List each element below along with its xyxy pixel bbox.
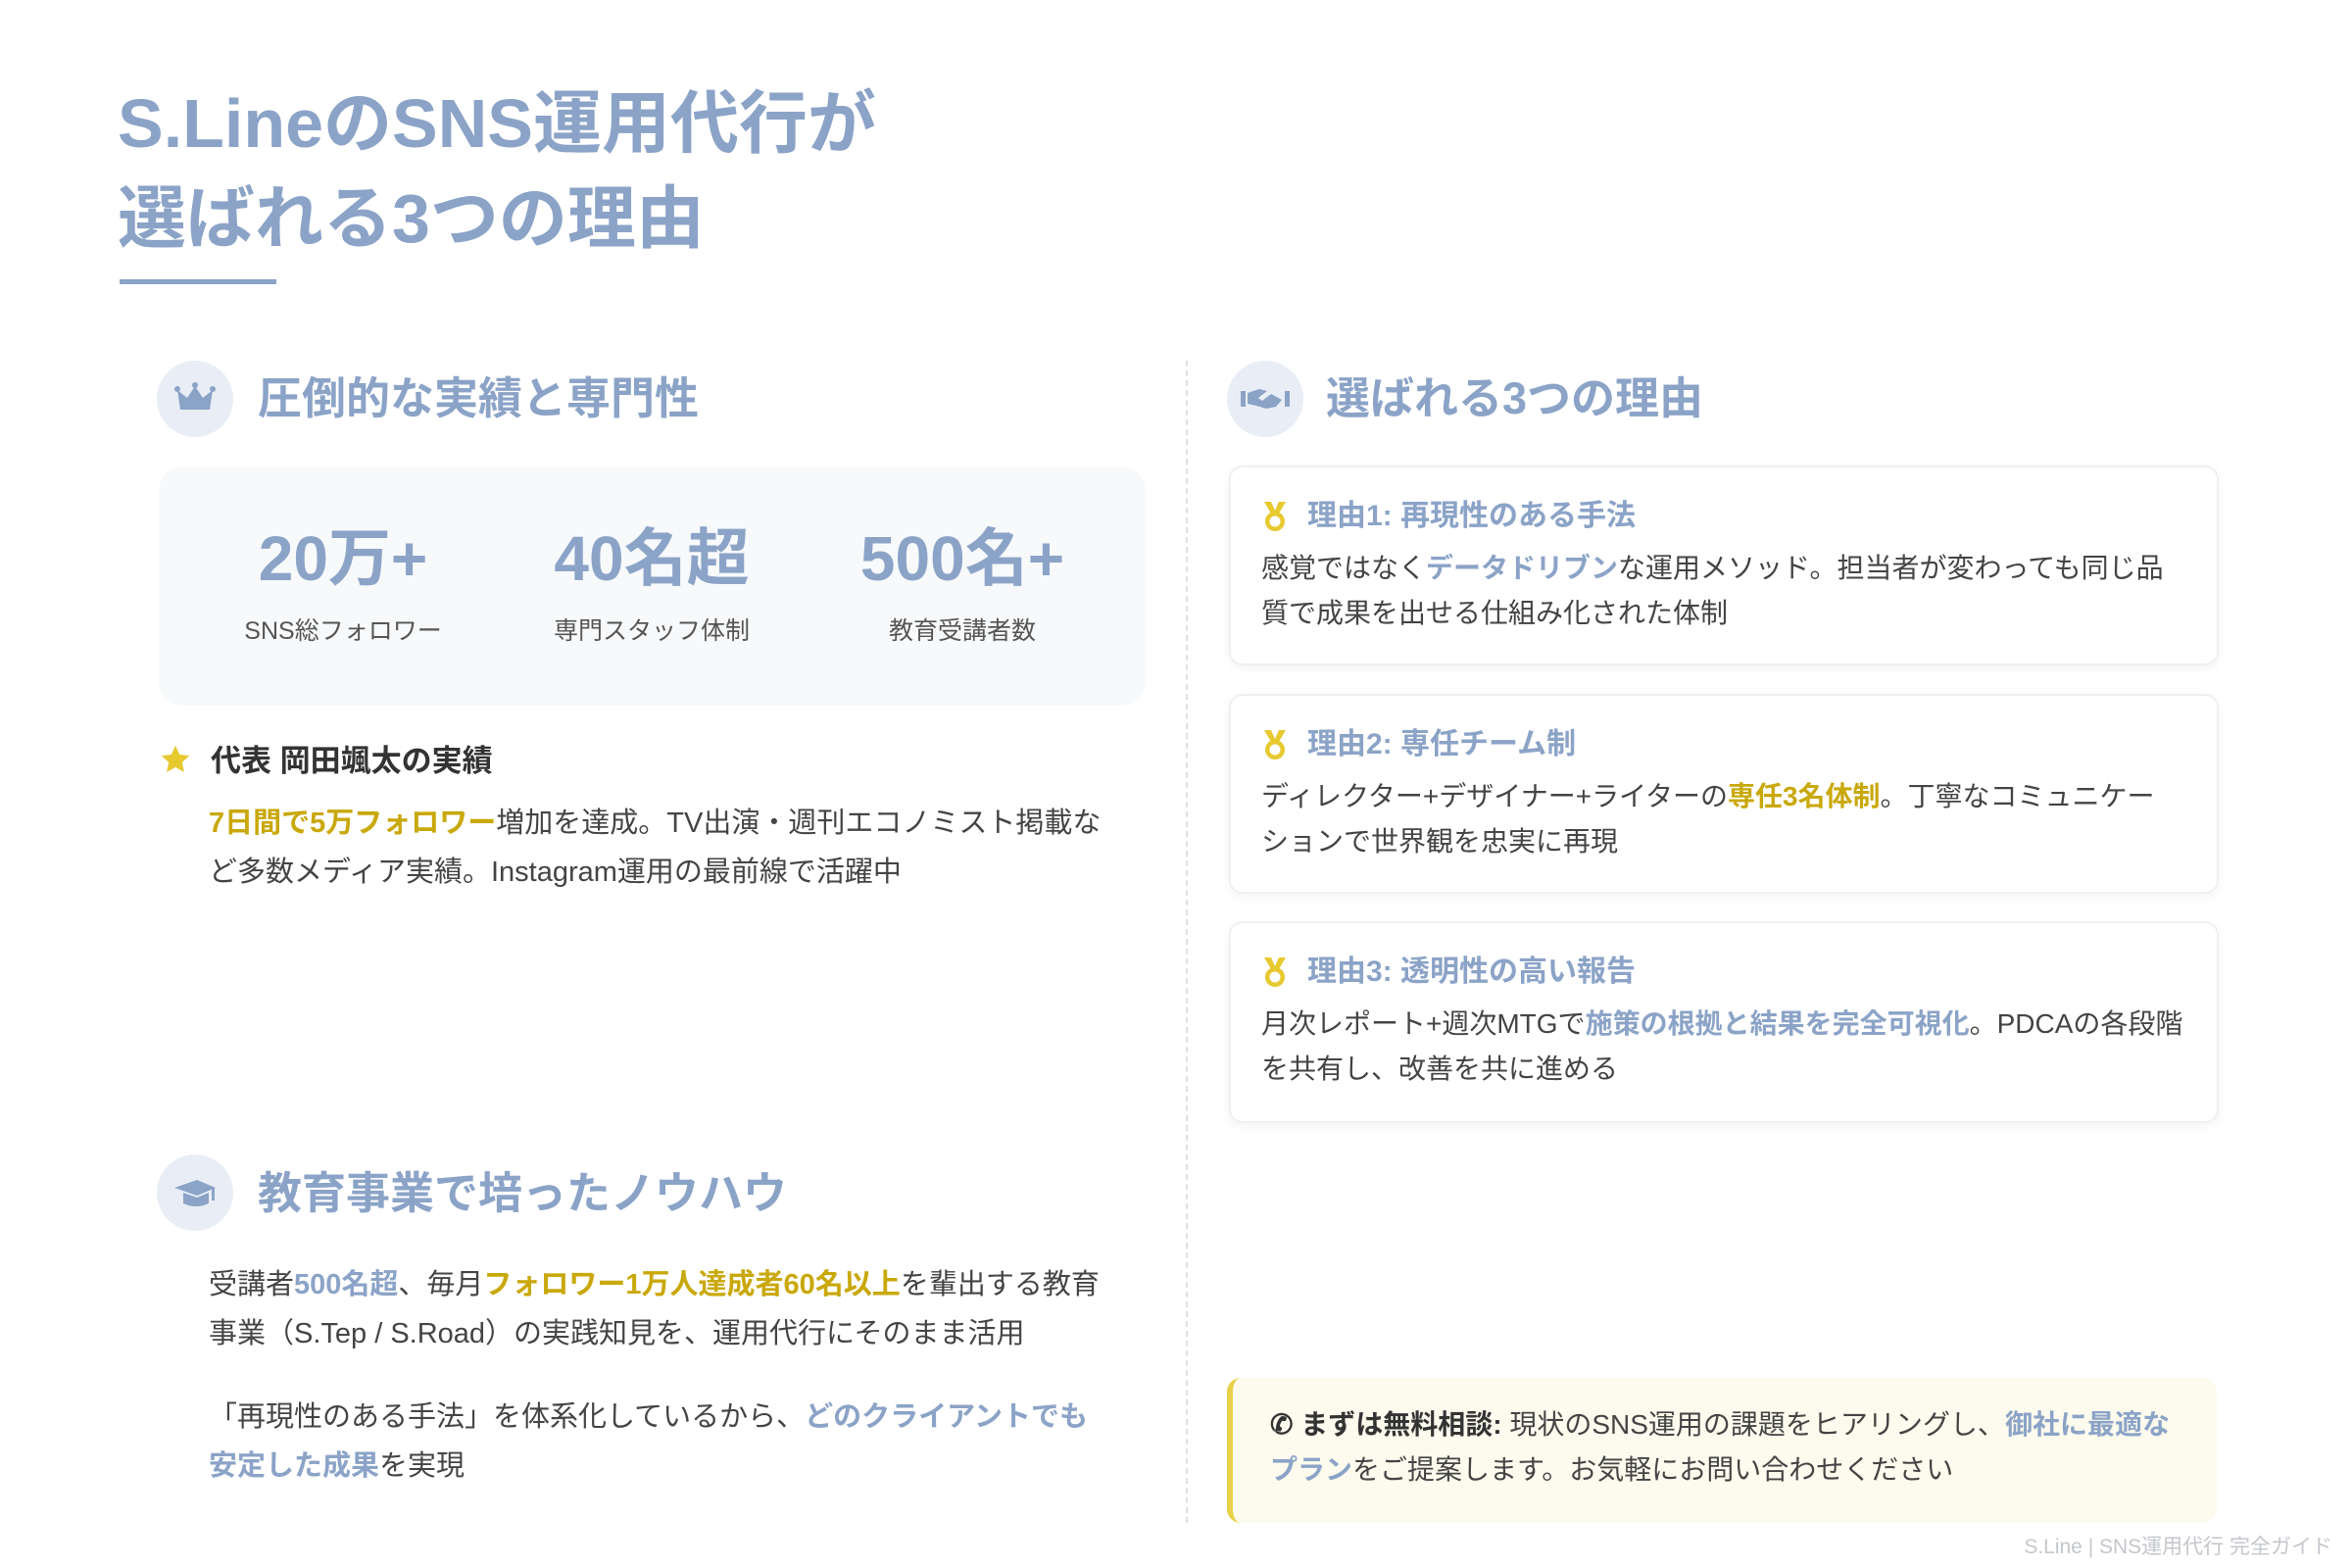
card: reason 1: [1229, 466, 2219, 665]
card title: 理由2: 専任チーム制: [1307, 728, 1576, 760]
stats box: [159, 466, 1146, 706]
stat: staff: 専門スタッフ体制: [554, 617, 750, 645]
callout: free consultation: [1227, 1378, 2217, 1523]
divider: [1186, 361, 1188, 1523]
card: reason 2: [1229, 694, 2219, 894]
card text: 感覚ではなくデータドリブンな運用メソッド。担当者が変わっても同じ品: [1261, 553, 2164, 583]
representative heading: 代表 岡田颯太の実績: [211, 744, 493, 778]
stat: followers: SNS総フォロワー: [244, 617, 442, 645]
heading: 教育事業で培ったノウハウ: [258, 1168, 787, 1218]
heading: 選ばれる3つの理由: [1326, 373, 1703, 423]
representative text: ど多数メディア実績。Instagram運用の最前線で活躍中: [209, 857, 902, 888]
icon: medal: [1264, 957, 1286, 987]
panel: achievements: [157, 361, 1101, 888]
stat: students: [860, 523, 1064, 645]
icon: medal: [1264, 502, 1286, 531]
representative text: [209, 808, 1101, 888]
icon: star: [161, 746, 190, 772]
callout text: [1270, 1409, 2170, 1485]
title: 選ばれる3つの理由: [118, 180, 705, 257]
card text: [1261, 1008, 2182, 1084]
representative text: 7日間で5万フォロワー増加を達成。TV出演・週刊エコノミスト掲載な: [209, 808, 1101, 839]
callout text: プランをご提案します。お気軽にお問い合わせください: [1270, 1454, 1953, 1485]
text block 2: 「再現性のある手法」を体系化しているから、どのクライアントでも: [209, 1401, 1088, 1433]
icon: graduation cap: [157, 1154, 233, 1231]
icon: crown: [157, 361, 233, 437]
card text: 質で成果を出せる仕組み化された体制: [1261, 598, 1728, 628]
title: S.LineのSNS運用代行が: [118, 85, 876, 162]
stat: staff: 40名超: [554, 523, 750, 594]
stat: followers: 20万+: [259, 523, 427, 594]
card text: ディレクター+デザイナー+ライターの専任3名体制。丁寧なコミュニケー: [1261, 781, 2155, 811]
text block 2: 安定した成果を実現: [209, 1450, 465, 1482]
callout text: ✆ まずは無料相談: 現状のSNS運用の課題をヒアリングし、御社に最適な: [1270, 1409, 2170, 1440]
text block 2: [209, 1401, 1088, 1482]
card text: を共有し、改善を共に進める: [1261, 1054, 1618, 1084]
heading: 圧倒的な実績と専門性: [258, 373, 699, 423]
text block 1: [209, 1268, 1100, 1349]
panel: education: [157, 1154, 1100, 1482]
stat: students: 500名+: [860, 523, 1064, 594]
title underline: [120, 279, 276, 284]
stat: followers: [244, 523, 442, 645]
card title: 理由3: 透明性の高い報告: [1307, 956, 1636, 988]
text block 1: 受講者500名超、毎月フォロワー1万人達成者60名以上を輩出する教育: [209, 1269, 1100, 1300]
panel: reasons: [1227, 361, 2219, 1123]
text block 1: 事業（S.Tep / S.Road）の実践知見を、運用代行にそのまま活用: [209, 1318, 1024, 1349]
stat: staff: [554, 523, 750, 645]
title: [118, 85, 876, 257]
card text: ションで世界観を忠実に再現: [1261, 826, 1618, 857]
icon: medal: [1264, 730, 1286, 760]
stat: students: 教育受講者数: [889, 617, 1036, 645]
card title: 理由1: 再現性のある手法: [1307, 500, 1636, 532]
icon: handshake: [1227, 361, 1303, 437]
card text: [1261, 781, 2155, 857]
card text: [1261, 553, 2164, 628]
footer: S.Line | SNS運用代行 完全ガイド: [2024, 1536, 2332, 1558]
card: reason 3: [1229, 921, 2219, 1123]
card text: 月次レポート+週次MTGで施策の根拠と結果を完全可視化。PDCAの各段階: [1261, 1008, 2182, 1039]
